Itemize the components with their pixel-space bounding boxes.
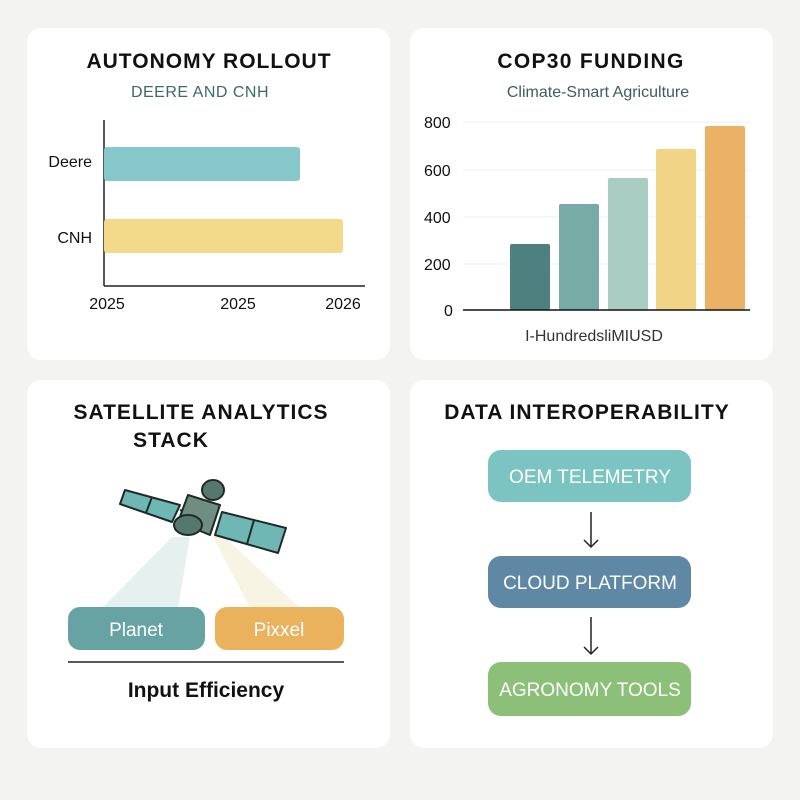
chart: funding bars: 400 (424, 210, 451, 227)
chart: autonomy bars (48, 120, 365, 313)
chart: funding bars: 200 (424, 257, 451, 274)
box: oem telemetry (488, 450, 691, 502)
title: satellite analytics stack: SATELLITE ANALYTICS (73, 401, 329, 424)
panel: data interoperability (410, 380, 773, 748)
box: agronomy tools: AGRONOMY TOOLS (499, 680, 681, 701)
title: cop30 funding: COP30 FUNDING (497, 50, 685, 73)
box: agronomy tools (488, 662, 691, 716)
title: autonomy rollout: DEERE AND CNH (131, 84, 269, 101)
chart: autonomy bars: CNH (57, 230, 92, 247)
box: oem telemetry: OEM TELEMETRY (509, 467, 671, 488)
chart: funding bars: 800 (424, 115, 451, 132)
panel: autonomy rollout (27, 28, 390, 360)
button: pixxel: Pixxel (254, 620, 304, 641)
chart: autonomy bars: Deere (48, 154, 92, 171)
chart: autonomy bars: 2025 (220, 296, 256, 313)
title: cop30 funding (497, 50, 689, 101)
button: planet: Planet (109, 620, 164, 641)
chart: funding bars: 0 (444, 303, 453, 320)
title: cop30 funding: Climate-Smart Agriculture (507, 84, 689, 101)
button: pixxel (215, 607, 344, 650)
chart: funding bars: 600 (424, 163, 451, 180)
title: autonomy rollout (86, 50, 332, 101)
panel: satellite analytics (27, 380, 390, 748)
chart: autonomy bars: 2025 (89, 296, 125, 313)
title: satellite analytics stack (73, 401, 329, 452)
title: satellite analytics stack: STACK (133, 429, 209, 452)
label: input efficiency: Input Efficiency (128, 679, 284, 702)
button: planet (68, 607, 205, 650)
chart: autonomy bars: 2026 (325, 296, 361, 313)
box: cloud platform: CLOUD PLATFORM (503, 573, 677, 594)
chart: funding bars: I-HundredsliMIUSD (525, 328, 663, 345)
title: data interoperability: DATA INTEROPERABILITY (444, 401, 730, 424)
arrow (584, 617, 598, 654)
box: cloud platform (488, 556, 691, 608)
chart: funding bars (424, 115, 750, 345)
icon: satellite with beams (102, 480, 300, 608)
title: autonomy rollout: AUTONOMY ROLLOUT (86, 50, 332, 73)
arrow (584, 512, 598, 547)
panel: cop30 funding (410, 28, 773, 360)
